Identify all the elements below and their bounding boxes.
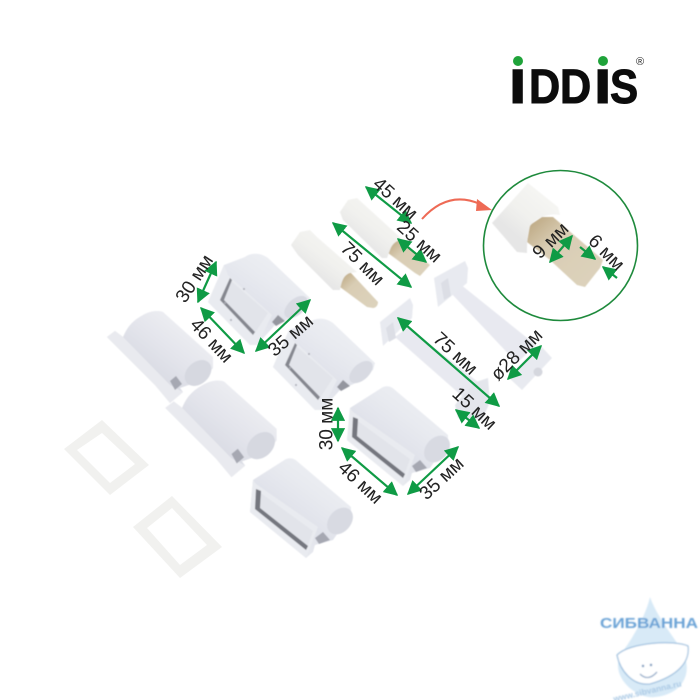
- dimension labels: 35 мм: [264, 311, 318, 361]
- logo: IDDIS: D: [560, 60, 591, 114]
- dowel 1: [291, 230, 378, 308]
- dimension labels: 35 мм: [416, 453, 468, 505]
- dowel 2: [340, 198, 430, 276]
- logo: IDDIS: I: [509, 60, 526, 113]
- screw 1: [434, 261, 552, 390]
- logo: IDDIS: ®: [636, 56, 644, 68]
- logo: IDDIS: [509, 56, 644, 114]
- dimension labels: 46 мм: [185, 315, 237, 367]
- watermark logo: Sibvanna: СИБВАННА: [600, 616, 699, 632]
- detail circle: [484, 170, 638, 320]
- housing lower right: [347, 386, 455, 486]
- dimension arrows: [198, 187, 617, 495]
- dimension labels: 75 мм: [429, 328, 481, 380]
- dimension labels: 30 мм: [316, 398, 338, 450]
- gasket frame 2: [133, 496, 222, 578]
- dimension labels: 25 мм: [392, 217, 446, 267]
- logo: IDDIS: I: [594, 60, 611, 113]
- dimension labels: 6 мм: [584, 231, 628, 275]
- logo: IDDIS: S: [610, 59, 638, 114]
- clip part 1: [107, 311, 217, 403]
- gasket frame 1: [64, 420, 149, 495]
- dimension labels: 15 мм: [448, 383, 500, 435]
- dimension labels: [172, 174, 628, 509]
- screw 2: [380, 298, 490, 420]
- watermark logo: Sibvanna: [600, 597, 699, 700]
- dimension labels: 46 мм: [334, 457, 386, 509]
- dimension labels: 30 мм: [172, 251, 218, 307]
- housing middle: [273, 319, 377, 410]
- callout arrow: [422, 199, 492, 219]
- dimension labels: 9 мм: [529, 219, 573, 263]
- housing bottom: [250, 458, 358, 558]
- housing top: [208, 254, 312, 345]
- dimension labels: 45 мм: [368, 174, 422, 224]
- clip part 2: [165, 381, 280, 477]
- logo: IDDIS: D: [529, 60, 560, 114]
- dimension labels: ø28 мм: [487, 325, 547, 385]
- dimension labels: 75 мм: [336, 238, 388, 290]
